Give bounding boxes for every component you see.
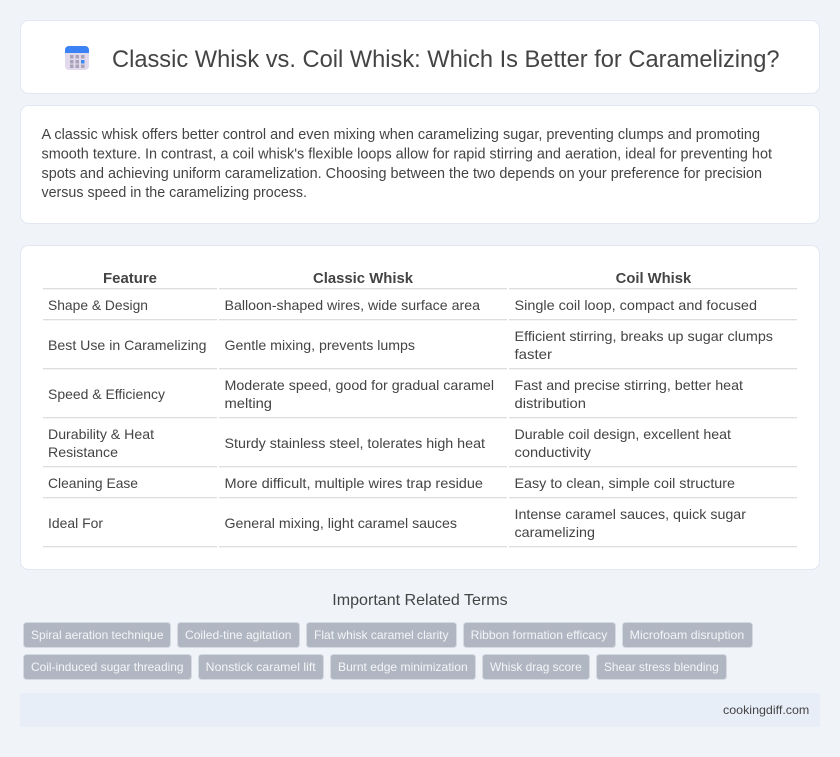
row: ideal for: Intense caramel sauces, quick sugar bbox=[514, 506, 746, 522]
table header row bbox=[43, 271, 797, 289]
row: durability and heat resistance: Durable coil design, excellent heat bbox=[514, 426, 731, 442]
footer source text: cookingdiff.com bbox=[723, 703, 809, 717]
text block: intro bbox=[42, 127, 772, 201]
text block: intro: versus speed in the caramelizing process. bbox=[42, 185, 307, 201]
footer bar bbox=[20, 693, 820, 727]
row: durability and heat resistance: Durability & Heat bbox=[48, 426, 154, 442]
tag list: related terms: Nonstick caramel lift bbox=[206, 660, 316, 674]
row: best use in caramelizing: Efficient stirring, breaks up sugar clumps bbox=[514, 328, 773, 344]
title: Classic Whisk vs. Coil Whisk: Which Is Better for Caramelizing? bbox=[112, 46, 780, 73]
tag list: related terms: Microfoam disruption bbox=[630, 628, 744, 642]
row: ideal for: caramelizing bbox=[514, 524, 595, 540]
tag list: related terms: Shear stress blending bbox=[604, 660, 719, 674]
row: cleaning ease: Cleaning Ease bbox=[48, 475, 138, 491]
row: durability and heat resistance: Sturdy stainless steel, tolerates high heat bbox=[224, 435, 485, 451]
icon: calendar grid bbox=[65, 46, 89, 70]
row: best use in caramelizing: faster bbox=[514, 346, 552, 362]
tag list: related terms: Burnt edge minimization bbox=[338, 660, 468, 674]
table header row: Coil Whisk bbox=[616, 271, 692, 287]
row: speed and efficiency: distribution bbox=[514, 395, 586, 411]
row: ideal for bbox=[43, 506, 797, 547]
row: best use in caramelizing: Gentle mixing, prevents lumps bbox=[224, 337, 415, 353]
row: speed and efficiency: Fast and precise stirring, better heat bbox=[514, 377, 743, 393]
row: best use in caramelizing bbox=[43, 328, 797, 369]
tag list: related terms: Ribbon formation efficacy bbox=[471, 628, 607, 642]
row: durability and heat resistance: Resistance bbox=[48, 444, 118, 460]
row: shape and design bbox=[43, 297, 797, 320]
panel: comparison table bbox=[20, 246, 820, 570]
tag list: related terms: Spiral aeration technique bbox=[31, 628, 164, 642]
text block: intro: smooth texture. In contrast, a coil whisk's flexible loops allow for rapid stirring and aeration, ideal for preventing hot bbox=[42, 146, 772, 162]
text block: intro: A classic whisk offers better control and even mixing when caramelizing sugar, preventing clumps and promoting bbox=[42, 127, 760, 143]
table header row: Classic Whisk bbox=[313, 271, 414, 287]
table header row: Feature bbox=[103, 271, 157, 287]
tag list: related terms bbox=[24, 622, 752, 680]
row: speed and efficiency: Speed & Efficiency bbox=[48, 386, 165, 402]
row: shape and design: Balloon-shaped wires, wide surface area bbox=[224, 297, 480, 313]
tag list: related terms: Coil-induced sugar threading bbox=[31, 660, 184, 674]
row: shape and design: Single coil loop, compact and focused bbox=[514, 297, 757, 313]
row: speed and efficiency: Moderate speed, good for gradual caramel bbox=[224, 377, 494, 393]
row: durability and heat resistance: conductivity bbox=[514, 444, 591, 460]
panel: header bbox=[20, 20, 820, 94]
row: cleaning ease bbox=[43, 475, 797, 498]
panel: introduction paragraph bbox=[20, 106, 820, 224]
text block: intro: spots and achieving uniform caramelization. Choosing between the two depends on your preference for precision bbox=[42, 166, 762, 182]
row: shape and design: Shape & Design bbox=[48, 297, 148, 313]
row: cleaning ease: More difficult, multiple wires trap residue bbox=[224, 475, 483, 491]
tag list: related terms: Whisk drag score bbox=[490, 660, 582, 674]
row: cleaning ease: Easy to clean, simple coil structure bbox=[514, 475, 735, 491]
row: speed and efficiency: melting bbox=[224, 395, 272, 411]
row: durability and heat resistance bbox=[43, 426, 797, 467]
row: ideal for: General mixing, light caramel sauces bbox=[224, 515, 457, 531]
tag list: related terms: Coiled-tine agitation bbox=[185, 628, 292, 642]
row: speed and efficiency bbox=[43, 377, 797, 418]
tag list: related terms: Flat whisk caramel clarity bbox=[314, 628, 448, 642]
row: ideal for: Ideal For bbox=[48, 515, 103, 531]
heading: important related terms: Important Related Terms bbox=[332, 592, 508, 609]
row: best use in caramelizing: Best Use in Caramelizing bbox=[48, 337, 206, 353]
